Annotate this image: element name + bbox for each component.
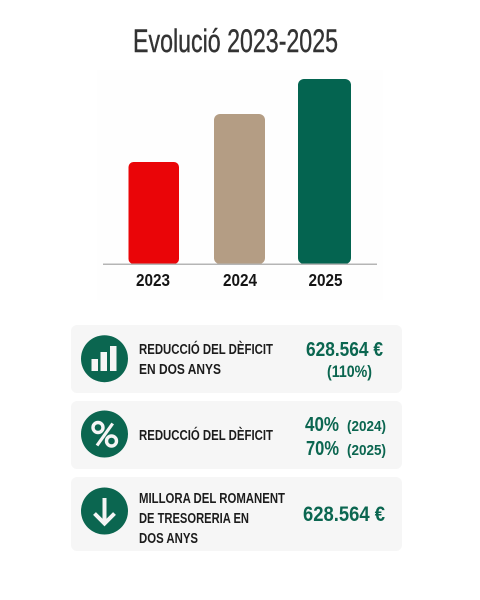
value: 2024: (2024) [347, 418, 386, 435]
title: Evolució 2023-2025 [133, 23, 338, 59]
value: (110%) [327, 362, 372, 381]
label: 2025: 2025 [308, 270, 343, 290]
label text: EN DOS ANYS [139, 362, 221, 378]
value: 2024: 40% [305, 413, 339, 436]
icon: bar chart [81, 335, 128, 382]
bar: 2024 [214, 114, 265, 264]
value: 628.564 € [303, 502, 385, 526]
label text: REDUCCIÓ DEL DÈFICIT [139, 426, 273, 444]
panel: deficit reduction in two years [71, 325, 402, 393]
panel: remainder improvement [71, 477, 402, 551]
bar chart [97, 70, 383, 300]
label text [139, 340, 273, 378]
bar: 2025 [298, 79, 351, 264]
axis line [103, 264, 377, 265]
icon: percent [81, 410, 128, 458]
panel: deficit reduction percentages [71, 401, 402, 469]
label text: DOS ANYS [139, 531, 198, 547]
value: 2025 [306, 437, 386, 460]
bar: 2023 [128, 162, 179, 264]
label text [139, 491, 285, 547]
label: 2023: 2023 [136, 270, 170, 290]
value: 2025: 70% [306, 437, 339, 460]
label text: REDUCCIÓ DEL DÈFICIT [139, 340, 273, 358]
value [306, 338, 384, 381]
label text: MILLORA DEL ROMANENT [139, 491, 285, 507]
label: 2024: 2024 [223, 270, 257, 290]
value: 2024 [305, 413, 386, 436]
label text: DE TRESORERIA EN [139, 511, 249, 527]
icon: down arrow [81, 488, 128, 534]
value: 628.564 € [306, 338, 384, 361]
value: 2025: (2025) [347, 442, 386, 459]
